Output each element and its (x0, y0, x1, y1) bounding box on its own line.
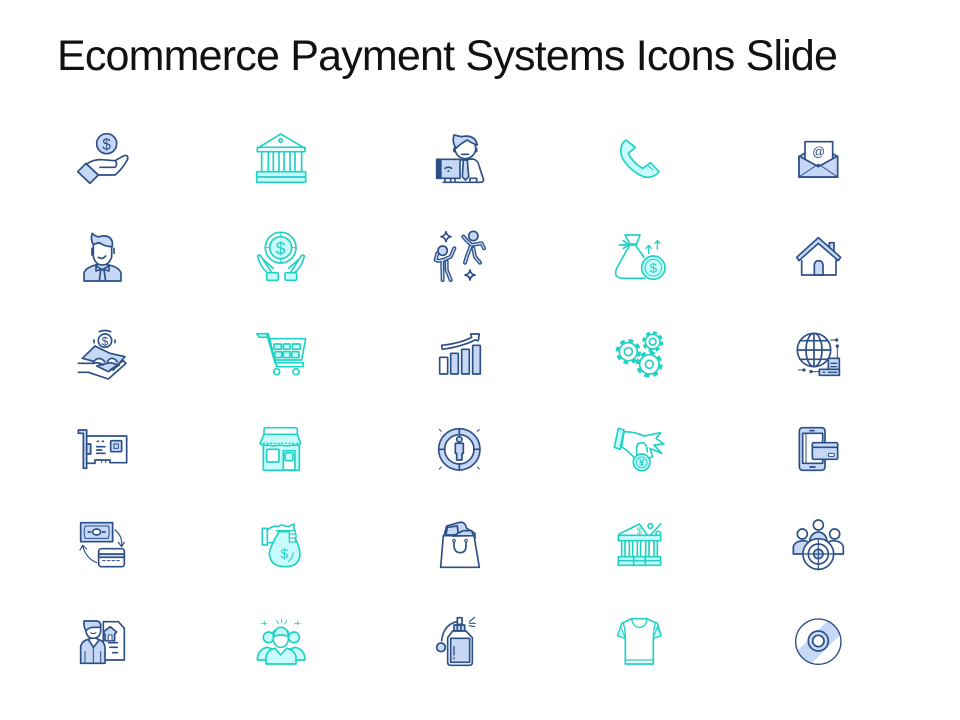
icon: hands cradling coin: $ (276, 238, 286, 258)
icon: businessman portrait (84, 233, 121, 281)
icon: support agent at monitor (437, 135, 484, 182)
icon: bank with percent (618, 524, 661, 565)
icon: house (797, 238, 841, 275)
icon: gears (617, 333, 662, 376)
icon: hand holding money bag: $ (280, 545, 288, 561)
icon: hand with yen coin: ¥ (639, 458, 645, 469)
icon: hand with money and coin: $ (102, 334, 109, 348)
icon grid (76, 132, 844, 666)
icon: globe and servers (797, 333, 839, 375)
icon: shopping cart (257, 334, 306, 375)
icon: team target (793, 520, 843, 570)
icon: email envelope: @ (812, 145, 825, 159)
icon: money sack with coin and arrows (616, 235, 665, 279)
title: Ecommerce Payment Systems Icons Slide (57, 32, 837, 80)
icon: network card (78, 430, 127, 468)
icon: hands cradling coin (258, 232, 304, 280)
icon: phone and credit card (799, 428, 838, 470)
icon: bank building (257, 134, 306, 182)
icon: hand with yen coin (614, 428, 664, 471)
icon: hand holding money bag (262, 524, 300, 567)
icon: shopping bag (441, 522, 479, 567)
icon: cash and card exchange (80, 523, 124, 567)
icon: storefront (260, 428, 301, 470)
icon: money sack with coin and arrows: $ (650, 260, 658, 275)
icon: dancing people with sparkles (436, 231, 484, 280)
icon: hand holding dollar coin (78, 134, 128, 183)
icon: businessman with house document (81, 621, 124, 663)
icon: team of three people (257, 619, 305, 664)
icon: rising bar chart with arrow (440, 334, 480, 374)
icon: hand holding dollar coin: $ (102, 136, 111, 153)
icon: telephone handset (621, 140, 659, 177)
icon: bank with percent: $ (637, 526, 643, 536)
icon: person in crosshair target (439, 429, 480, 470)
icon: compact disc (795, 618, 842, 665)
icon: t-shirt (618, 619, 661, 664)
icon: hand with money and coin (78, 330, 126, 379)
icon: email envelope (799, 142, 838, 177)
icon: perfume spray bottle (437, 617, 475, 665)
